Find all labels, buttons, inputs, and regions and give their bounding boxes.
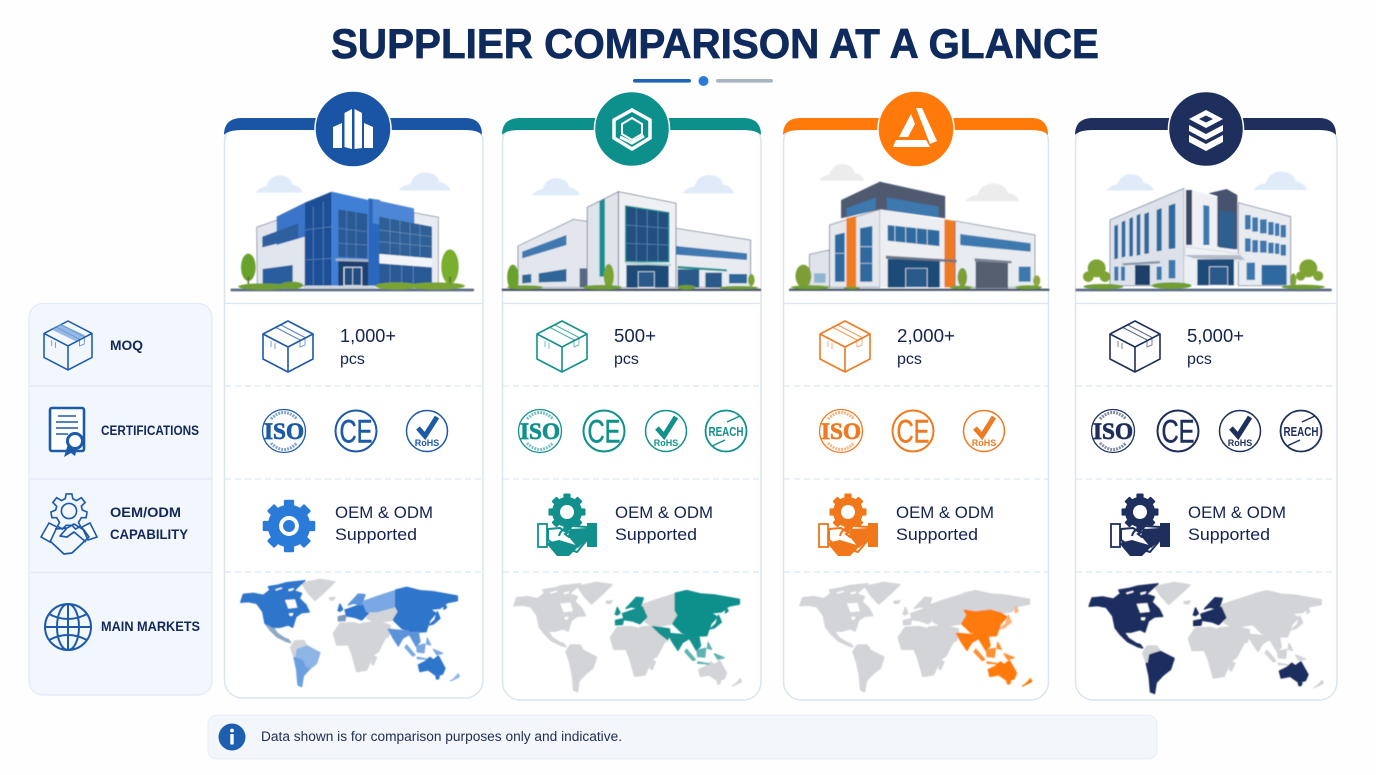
OEM capability: Supported [896,525,978,544]
icon: info [218,724,246,750]
footer note: Data shown is for comparison purposes only and indicative. [261,729,622,744]
OEM capability: Supported [335,525,417,544]
ISO badge: ISO [821,419,861,444]
CE badge [892,410,934,452]
certification badges [1092,410,1322,452]
MOQ value [1110,321,1244,372]
header bar [224,118,482,135]
building illustration [1076,172,1332,291]
MOQ value: 2,000+ [897,326,955,346]
header bar [783,118,1048,135]
ISO badge [262,410,306,452]
REACH badge: REACH [1284,424,1318,439]
world map [241,579,459,687]
panel: row labels [29,304,212,695]
supplier card 1: blue [224,91,483,698]
footer note [208,715,1157,759]
CE badge: CE [1162,414,1194,450]
MOQ value: pcs [897,351,922,368]
building illustration [502,175,761,291]
ISO badge [518,410,562,452]
MOQ value: pcs [340,351,365,368]
MOQ value: 1,000+ [340,326,396,346]
title: SUPPLIER COMPARISON AT A GLANCE [331,20,1099,67]
MOQ value [263,321,396,372]
row label: MOQ [44,321,143,370]
OEM capability: Supported [615,525,697,544]
OEM capability: OEM & ODM [335,503,433,522]
CE badge: CE [588,414,620,450]
building illustration [231,173,474,291]
RoHS badge [406,410,448,452]
row label: OEM/ODM capability: OEM/ODM [110,504,181,520]
RoHS badge [964,410,1004,452]
OEM capability: OEM & ODM [1188,503,1286,522]
REACH badge: REACH [708,424,744,439]
ISO badge: ISO [264,419,304,444]
MOQ value: 500+ [614,326,656,346]
OEM capability [263,500,433,552]
RoHS badge: RoHS [415,438,439,448]
CE badge [584,410,624,452]
certification badges [262,410,448,452]
RoHS badge: RoHS [654,438,678,448]
CE badge [1158,410,1198,452]
RoHS badge [646,410,686,452]
header badge with towers icon [315,91,391,167]
OEM capability: OEM & ODM [896,503,994,522]
row label: main markets [45,604,200,650]
RoHS badge: RoHS [972,438,996,448]
OEM capability [1111,494,1286,556]
CE badge: CE [896,414,930,450]
MOQ value [537,321,656,372]
row label: OEM/ODM capability: CAPABILITY [110,526,189,542]
title accent divider [633,76,773,86]
MOQ value: pcs [1187,351,1212,368]
row label: OEM/ODM capability [41,494,189,554]
ISO badge: ISO [1093,419,1133,444]
REACH badge [1280,410,1322,452]
row label: certifications [50,408,199,457]
row label: main markets: MAIN MARKETS [101,618,200,634]
supplier card 4: navy [1075,92,1337,700]
row label: certifications: CERTIFICATIONS [101,422,199,438]
REACH badge [706,410,746,452]
ISO badge [820,410,862,452]
row label: MOQ: MOQ [110,337,143,353]
world map [1089,582,1323,694]
supplier card 2: teal [502,92,761,700]
OEM capability: Supported [1188,525,1270,544]
CE badge: CE [340,414,372,450]
header bar [502,118,761,135]
header badge with stacked layers icon [1168,92,1244,166]
RoHS badge: RoHS [1228,438,1252,448]
certification badges [820,410,1004,452]
supplier card 3: orange [783,91,1049,700]
building illustration [789,164,1049,291]
world map [800,582,1032,692]
OEM capability [538,494,713,556]
RoHS badge [1220,410,1260,452]
OEM capability: OEM & ODM [615,503,713,522]
header badge with triangle icon [878,91,954,167]
OEM capability [819,494,994,556]
MOQ value [820,321,955,372]
header bar [1075,118,1336,135]
header badge with hexagon icon [594,92,670,166]
certification badges [518,410,746,452]
CE badge [336,410,376,452]
ISO badge [1092,410,1134,452]
MOQ value: 5,000+ [1187,326,1244,346]
MOQ value: pcs [614,351,639,368]
world map [514,582,741,692]
ISO badge: ISO [520,419,560,444]
